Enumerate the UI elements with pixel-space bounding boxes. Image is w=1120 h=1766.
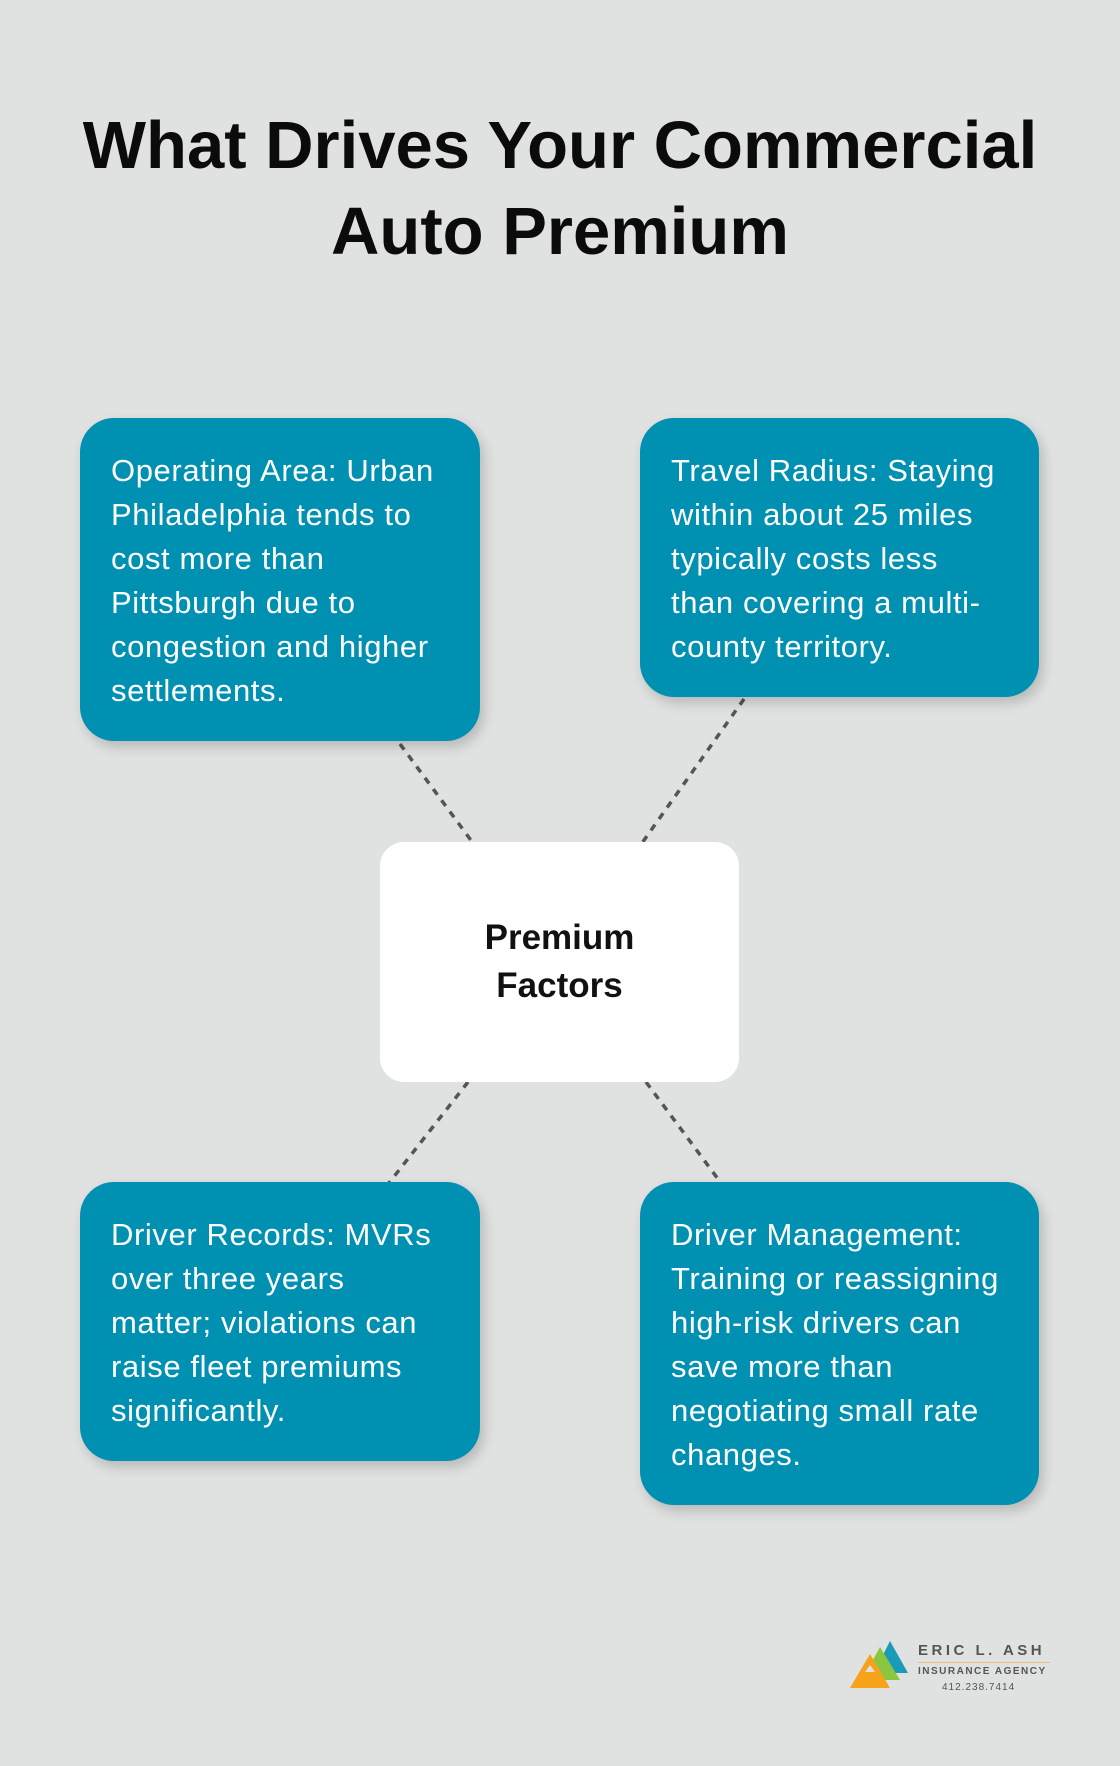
panel: travel radius bbox=[640, 418, 1039, 697]
panel: driver management: changes. bbox=[671, 1437, 802, 1472]
logo: ERIC L. ASH bbox=[918, 1642, 1045, 1659]
logo bbox=[850, 1641, 1050, 1693]
panel: driver records: over three years bbox=[111, 1261, 345, 1296]
panel: travel radius: within about 25 miles bbox=[671, 497, 973, 532]
center: premium factors: Factors bbox=[496, 966, 623, 1005]
panel: travel radius: typically costs less bbox=[671, 541, 938, 576]
center: premium factors: Premium bbox=[485, 918, 634, 957]
center: premium factors bbox=[380, 842, 739, 1082]
panel: driver management: save more than bbox=[671, 1349, 893, 1384]
panel: driver records: raise fleet premiums bbox=[111, 1349, 402, 1384]
panel: travel radius: than covering a multi- bbox=[671, 585, 981, 620]
panel: operating area: congestion and higher bbox=[111, 629, 429, 664]
panel: driver management: high-risk drivers can bbox=[671, 1305, 961, 1340]
panel: driver records bbox=[80, 1182, 480, 1461]
title: What Drives Your Commercial bbox=[83, 108, 1037, 183]
panel: driver records: Driver Records: MVRs bbox=[111, 1217, 431, 1252]
panel: operating area: Philadelphia tends to bbox=[111, 497, 411, 532]
panel: driver management: Training or reassigning bbox=[671, 1261, 999, 1296]
panel: operating area: settlements. bbox=[111, 673, 285, 708]
panel: operating area: Pittsburgh due to bbox=[111, 585, 356, 620]
panel: driver management: negotiating small rate bbox=[671, 1393, 979, 1428]
panel: driver records: matter; violations can bbox=[111, 1305, 417, 1340]
panel: driver management bbox=[640, 1182, 1039, 1505]
panel: driver records: significantly. bbox=[111, 1393, 286, 1428]
panel: operating area: cost more than bbox=[111, 541, 324, 576]
panel: travel radius: Travel Radius: Staying bbox=[671, 453, 995, 488]
title: Auto Premium bbox=[331, 194, 789, 269]
logo: 412.238.7414 bbox=[942, 1682, 1015, 1693]
panel: driver management: Driver Management: bbox=[671, 1217, 963, 1252]
title bbox=[82, 108, 1037, 269]
panel: operating area: Operating Area: Urban bbox=[111, 453, 434, 488]
logo: INSURANCE AGENCY bbox=[918, 1666, 1047, 1677]
panel: travel radius: county territory. bbox=[671, 629, 893, 664]
panel: operating area bbox=[80, 418, 480, 741]
